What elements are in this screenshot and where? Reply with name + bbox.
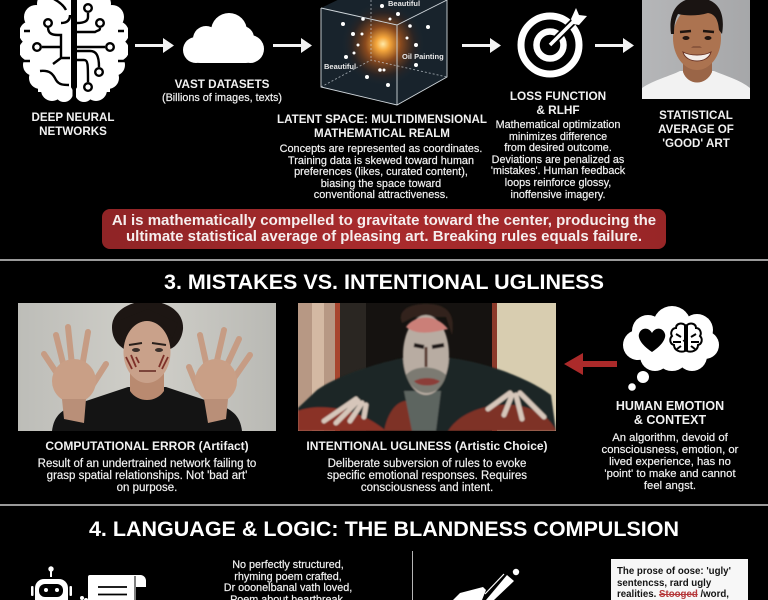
image: computational error portrait [18, 303, 276, 431]
text: loss function description: loops reinforce glossy, [505, 177, 611, 189]
callout: red conclusion banner [102, 209, 666, 249]
heading: human emotion [616, 399, 724, 426]
text: loss function description: Mathematical optimization [496, 119, 620, 131]
text: computational error description [38, 458, 256, 494]
callout: red conclusion banner: AI is mathematically compelled to gravitate toward the center, producing the [112, 212, 656, 229]
text: intentional ugliness description: specific emotional responses. Requires [327, 470, 527, 482]
text: loss function description: Deviations are penalized as [492, 154, 624, 166]
callout: raw prose note card: realities. Stooged /word, [617, 589, 729, 600]
icon: robot with scroll [31, 566, 146, 600]
heading: loss function [510, 89, 606, 117]
arrow: target to portrait [595, 38, 634, 53]
text: loss function description: from desired outcome. [504, 142, 612, 154]
icon: target with arrow [518, 8, 587, 78]
text: human emotion description: feel angst. [644, 480, 696, 492]
heading: vast datasets: (Billions of images, texts) [162, 92, 282, 104]
text: bland poem example [224, 559, 352, 600]
caption: intentional ugliness: INTENTIONAL UGLINESS (Artistic Choice) [306, 439, 548, 453]
text: latent space description [280, 143, 482, 201]
callout: raw prose note card: The prose of oose: 'ugly' [617, 566, 731, 577]
text: human emotion description: 'point' to make and cannot [604, 468, 736, 480]
heading: loss function: & RLHF [536, 103, 580, 117]
callout: raw prose note card: sentencss, rard ugly [617, 578, 711, 588]
text: loss function description: 'mistakes'. Human feedback [491, 165, 625, 177]
heading: latent space: LATENT SPACE: MULTIDIMENSIONAL [277, 113, 487, 126]
heading: section 3: 3. MISTAKES VS. INTENTIONAL UGLINESS [164, 270, 604, 294]
text: loss function description [491, 119, 626, 201]
heading: statistical average: STATISTICAL [659, 109, 733, 122]
caption: computational error: COMPUTATIONAL ERROR (Artifact) [45, 439, 249, 453]
text: latent space description: preferences (likes, curated content), [294, 166, 468, 178]
text: latent space description: biasing the space toward [321, 178, 441, 190]
heading: statistical average [658, 109, 734, 150]
text: human emotion description: An algorithm, devoid of [612, 432, 728, 444]
heading: human emotion: HUMAN EMOTION [616, 399, 724, 413]
text: bland poem example: Dr ooonelbanal vath loved, [224, 582, 352, 594]
heading: latent space: MATHEMATICAL REALM [314, 127, 450, 140]
heading: statistical average: 'GOOD' ART [662, 137, 730, 150]
callout: red conclusion banner: ultimate statistical average of pleasing art. Breaking rules equals failure. [126, 228, 642, 245]
icon: circuit brain [20, 0, 128, 102]
heading: vast datasets [162, 78, 282, 104]
text: human emotion description [602, 432, 738, 492]
text: loss function description: inoffensive imagery. [510, 189, 606, 201]
text: computational error description: on purpose. [117, 482, 177, 494]
text: intentional ugliness description: consciousness and intent. [361, 482, 493, 494]
arrow: cube to target [462, 38, 501, 53]
text: latent space description: Training data is skewed toward human [288, 154, 474, 166]
heading: section 4: 4. LANGUAGE & LOGIC: THE BLANDNESS COMPULSION [89, 517, 679, 541]
icon: hand with pen [453, 568, 520, 600]
heading: statistical average: AVERAGE OF [658, 123, 734, 136]
icon: cloud [183, 13, 264, 63]
arrow: brain to cloud [135, 38, 174, 53]
text: computational error description: Result of an undertrained network failing to [38, 458, 256, 470]
text: intentional ugliness description [327, 458, 527, 494]
text: loss function description: minimizes difference [509, 131, 607, 143]
heading: loss function: LOSS FUNCTION [510, 89, 606, 103]
image: smiling portrait [642, 0, 750, 99]
text: latent space description: Concepts are represented as coordinates. [280, 143, 482, 155]
heading: latent space [277, 113, 487, 140]
heading: deep neural networks [32, 111, 114, 138]
heading: deep neural networks: DEEP NEURAL [32, 111, 114, 124]
text: bland poem example: rhyming poem crafted, [234, 570, 342, 582]
illustration: latent space cube: Beautiful [324, 62, 356, 71]
text: intentional ugliness description: Deliberate subversion of rules to evoke [328, 458, 526, 470]
heading: human emotion: & CONTEXT [634, 412, 706, 426]
heading: deep neural networks: NETWORKS [39, 125, 107, 138]
illustration: latent space cube [320, 0, 448, 106]
heading: vast datasets: VAST DATASETS [175, 78, 269, 91]
text: latent space description: conventional attractiveness. [314, 189, 448, 201]
text: human emotion description: lived experience, has no [609, 456, 731, 468]
text: computational error description: grasp spatial relationships. Not 'bad art' [47, 470, 247, 482]
image: intentional ugliness painting [298, 303, 556, 431]
text: bland poem example: No perfectly structured, [232, 559, 344, 571]
callout: raw prose note card [611, 559, 748, 600]
arrow: cloud to cube [273, 38, 312, 53]
arrow: emotion to painting (red) [564, 353, 617, 375]
icon: thought cloud with heart and brain [623, 306, 719, 391]
illustration: latent space cube: Oil Painting [402, 52, 444, 61]
text: human emotion description: consciousness, emotion, or [602, 444, 738, 456]
